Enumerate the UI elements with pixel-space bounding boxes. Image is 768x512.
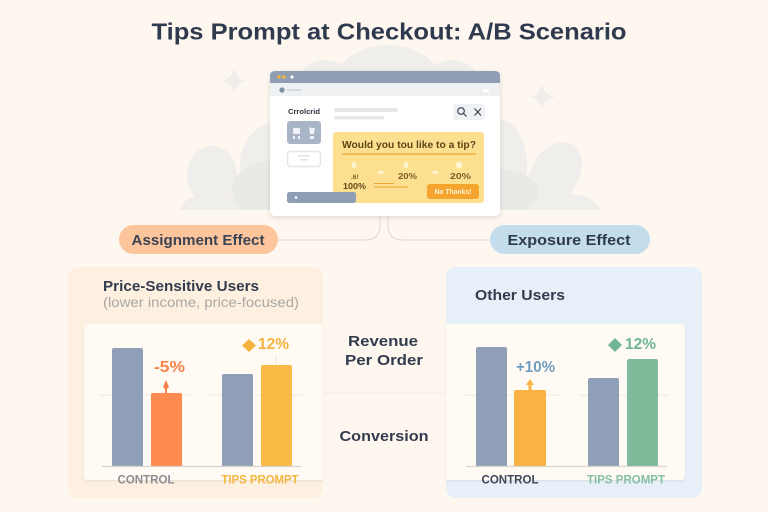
axis label: control: CONTROL	[482, 474, 538, 486]
bar: tips baseline	[588, 378, 619, 466]
tip prompt question: Would you tou like to a tip?	[342, 139, 476, 151]
browser address bar	[270, 83, 500, 96]
center divider	[323, 392, 446, 394]
chart card	[446, 324, 685, 480]
tip prompt card	[333, 132, 484, 203]
pill: exposure effect	[490, 225, 650, 254]
bar: control treatment	[151, 393, 182, 466]
callout: minus 5 percent	[154, 359, 185, 393]
pill: assignment effect: Assignment Effect	[132, 233, 265, 249]
product image placeholder with cart icons	[287, 121, 321, 144]
header placeholder lines	[334, 108, 398, 120]
bar: control baseline	[112, 348, 143, 466]
metric label: revenue per order: Revenue	[348, 333, 418, 350]
pill: assignment effect	[119, 225, 278, 254]
metric label: revenue per order: Per Order	[345, 352, 423, 369]
browser title bar	[270, 71, 500, 83]
callout: 12 percent	[608, 336, 656, 353]
search and close icons	[453, 104, 485, 120]
callout: plus 10 percent: +10%	[516, 359, 555, 376]
bar: tips treatment	[261, 365, 292, 466]
bar: control treatment	[514, 390, 546, 466]
tip options: 20%	[398, 172, 417, 181]
tip options: 100%	[343, 182, 366, 191]
callout: 12 percent	[242, 336, 289, 365]
metric label: conversion: Conversion	[340, 428, 428, 445]
guide lines	[464, 394, 668, 396]
axis label: tips prompt: TIPS PROMPT	[587, 474, 665, 486]
callout: minus 5 percent: -5%	[154, 359, 185, 376]
browser window mockup	[270, 71, 500, 216]
panel: other users	[446, 267, 702, 498]
tip options: 20%	[450, 172, 471, 181]
connector lines from browser to effect pills	[278, 216, 490, 240]
panel subheading: (lower income, price-focused)	[103, 295, 299, 310]
no thanks button: No Thanks!	[434, 189, 472, 196]
tip options	[343, 162, 471, 191]
axis label: tips prompt: TIPS PROMPT	[222, 474, 298, 486]
site logo text: Crrolcrid	[288, 107, 320, 116]
panel heading: Other Users	[475, 288, 565, 304]
bar: control baseline	[476, 347, 507, 466]
small outlined button	[288, 152, 320, 166]
axis label: control: CONTROL	[118, 474, 174, 486]
background cloud silhouette with sparkles	[180, 45, 600, 210]
guide lines	[100, 394, 302, 396]
title: Tips Prompt at Checkout: A/B Scenario	[152, 18, 626, 44]
panel: price-sensitive users	[68, 267, 323, 498]
tip options: .6!	[351, 174, 359, 181]
callout: 12 percent: 12%	[258, 336, 289, 353]
infographic canvas	[68, 22, 702, 498]
checkout bar	[287, 192, 356, 203]
bar: tips treatment	[627, 359, 658, 466]
pill: exposure effect: Exposure Effect	[508, 233, 631, 249]
chart card	[84, 324, 323, 480]
panel heading: Price-Sensitive Users	[103, 279, 259, 295]
callout: 12 percent: 12%	[625, 336, 656, 353]
no thanks button	[427, 184, 479, 199]
callout: plus 10 percent	[516, 359, 555, 390]
bar: tips baseline	[222, 374, 253, 466]
